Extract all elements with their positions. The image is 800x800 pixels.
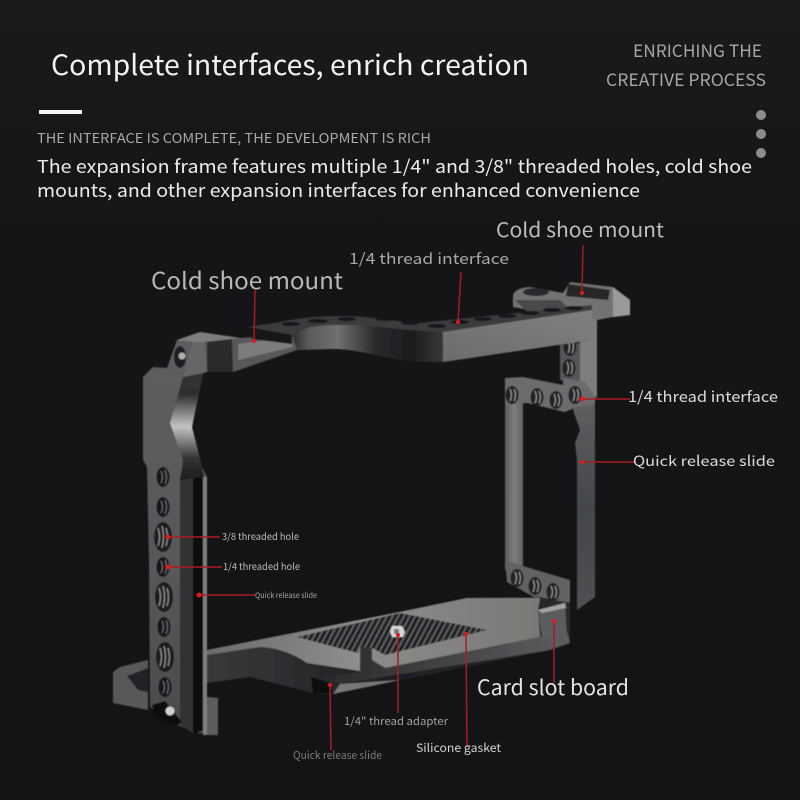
red leader lines bbox=[166, 245, 635, 750]
crossbar holes bbox=[506, 386, 582, 409]
right upright rear piece bbox=[560, 318, 597, 398]
pagination dots bbox=[756, 110, 766, 158]
left column bbox=[113, 332, 240, 735]
top pin bbox=[174, 346, 186, 368]
top right hook with cold shoe bbox=[513, 282, 630, 320]
callout labels: Quick release slide bbox=[255, 590, 317, 601]
callout labels: Cold shoe mount bbox=[496, 214, 664, 243]
camera cage illustration bbox=[113, 282, 630, 735]
callout labels: 1/4" thread adapter bbox=[344, 713, 449, 729]
callout labels: Quick release slide bbox=[633, 451, 775, 471]
threaded holes column bbox=[154, 467, 174, 697]
callout labels bbox=[151, 214, 778, 763]
top bar holes bbox=[282, 306, 583, 328]
underside recess bbox=[311, 677, 333, 693]
description text: mounts, and other expansion interfaces for enhanced convenience bbox=[37, 177, 640, 203]
accent bar bbox=[39, 110, 82, 114]
header tagline bbox=[606, 37, 766, 91]
callout labels: Card slot board bbox=[477, 672, 629, 702]
callout labels: Silicone gasket bbox=[416, 740, 502, 756]
callout labels: 1/4 thread interface bbox=[628, 386, 778, 407]
callout labels: 1/4 threaded hole bbox=[223, 559, 300, 573]
callout labels: Cold shoe mount bbox=[151, 262, 343, 296]
description text: The expansion frame features multiple 1/4" and 3/8" threaded holes, cold shoe bbox=[37, 153, 752, 179]
plate top surface bbox=[207, 598, 540, 671]
card slot stop bbox=[538, 603, 567, 638]
header tagline: CREATIVE PROCESS bbox=[606, 66, 766, 91]
callout labels: 1/4 thread interface bbox=[349, 248, 509, 269]
title: Complete interfaces, enrich creation bbox=[51, 44, 529, 84]
base plate bbox=[207, 597, 570, 694]
right foot bbox=[207, 697, 218, 735]
left foot bbox=[113, 660, 148, 710]
subheading: THE INTERFACE IS COMPLETE, THE DEVELOPMENT IS RICH bbox=[37, 127, 431, 147]
knurled grip pad bbox=[297, 613, 487, 655]
tripod screw bbox=[390, 626, 405, 637]
callout labels: 3/8 threaded hole bbox=[222, 529, 299, 543]
callout labels: Quick release slide bbox=[293, 748, 382, 763]
lower crossbar holes bbox=[510, 569, 560, 601]
right cage frame bbox=[505, 377, 595, 610]
top bar bbox=[205, 305, 592, 372]
header tagline: ENRICHING THE bbox=[633, 37, 762, 62]
plate front lip bbox=[318, 632, 570, 684]
description text bbox=[37, 153, 752, 203]
foot screw bbox=[152, 701, 182, 727]
